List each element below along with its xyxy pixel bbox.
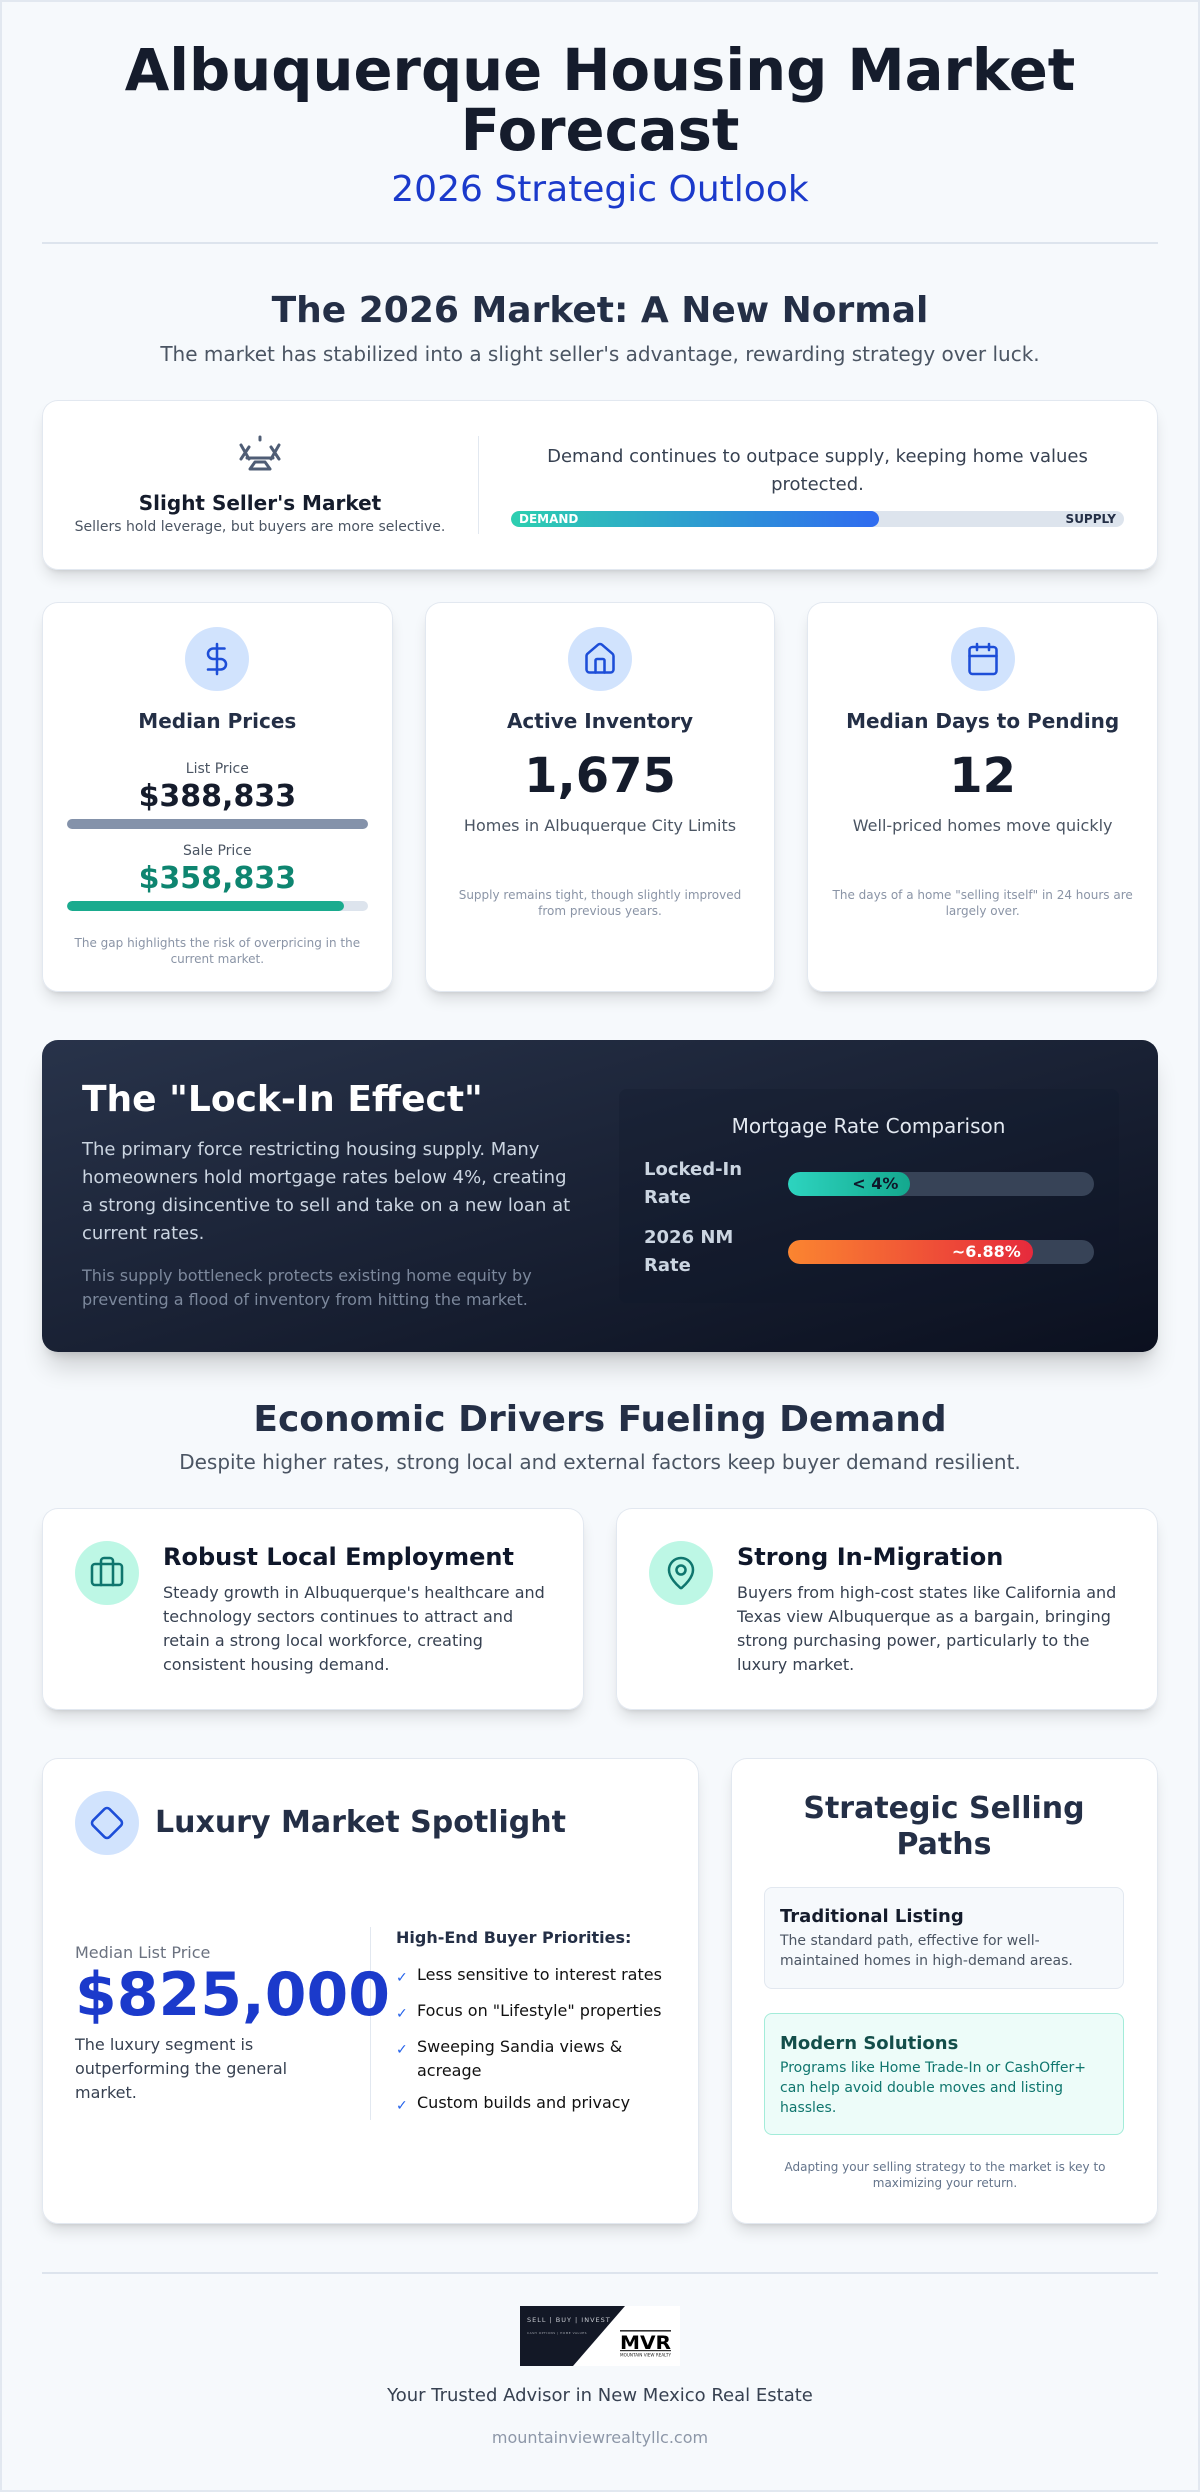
driver text: Buyers from high-cost states like California and <box>737 1583 1116 1602</box>
panel: local employment <box>42 1508 584 1710</box>
lock-in paragraph: current rates. <box>82 1223 204 1244</box>
logo: SELL | BUY | INVEST <box>527 2316 611 2324</box>
lock-in paragraph <box>82 1139 570 1244</box>
driver heading: Robust Local Employment <box>163 1543 514 1571</box>
logo: CASH OPTIONS | HOME VALUES <box>527 2331 587 2335</box>
path text: hassles. <box>780 2100 836 2116</box>
list price value: $388,833 <box>139 779 296 814</box>
paths note: Adapting your selling strategy to the market is key to <box>784 2160 1106 2174</box>
days description: Well-priced homes move quickly <box>853 816 1113 835</box>
icon: calendar <box>951 627 1015 691</box>
priorities list: Custom builds and privacy <box>417 2093 630 2112</box>
card heading: Median Prices <box>138 709 296 733</box>
luxury heading: Luxury Market Spotlight <box>155 1805 566 1840</box>
driver text: technology sectors continues to attract and <box>163 1607 513 1626</box>
lock-in heading: The "Lock-In Effect" <box>82 1079 483 1120</box>
footer tagline: Your Trusted Advisor in New Mexico Real Estate <box>387 2385 813 2406</box>
icon: house <box>568 627 632 691</box>
days number: 12 <box>949 748 1016 804</box>
path title: Traditional Listing <box>780 1906 964 1927</box>
driver text: retain a strong local workforce, creating <box>163 1631 483 1650</box>
path text: The standard path, effective for well- <box>780 1933 1040 1949</box>
path: modern solutions <box>764 2013 1124 2135</box>
days note: largely over. <box>946 904 1020 918</box>
driver text: luxury market. <box>737 1655 854 1674</box>
bar: locked-in <box>788 1172 1094 1196</box>
demand statement: Demand continues to outpace supply, keeping home values <box>547 446 1088 467</box>
inventory number: 1,675 <box>524 748 676 804</box>
driver text: Steady growth in Albuquerque's healthcare and <box>163 1583 545 1602</box>
status description: Sellers hold leverage, but buyers are more selective. <box>75 519 445 535</box>
sale price bar <box>67 901 368 911</box>
panel: market balance <box>42 400 1158 570</box>
subtitle: 2026 Strategic Outlook <box>391 169 809 210</box>
section subheading: The market has stabilized into a slight seller's advantage, rewarding strategy over luck. <box>160 342 1040 366</box>
row label: locked-in: Locked-In <box>644 1159 742 1180</box>
status title: Slight Seller's Market <box>139 491 381 515</box>
demand supply bar: SUPPLY <box>1066 512 1116 526</box>
icon: dollar <box>185 627 249 691</box>
driver text <box>736 1583 1116 1674</box>
icon: scale <box>239 436 281 470</box>
luxury description: The luxury segment is <box>75 2035 253 2054</box>
bar: locked-in: < 4% <box>852 1174 898 1193</box>
paths note <box>784 2160 1106 2190</box>
demand statement <box>547 446 1088 495</box>
row label: 2026 NM: 2026 NM <box>644 1227 733 1248</box>
demand statement: protected. <box>771 474 864 495</box>
title <box>125 37 1075 164</box>
logo: MVR <box>620 2332 671 2354</box>
days note <box>832 888 1133 918</box>
row label: 2026 NM <box>644 1227 733 1276</box>
median list label: Median List Price <box>75 1943 210 1962</box>
priorities list: ✓ <box>396 1970 408 1986</box>
lock-in secondary note: This supply bottleneck protects existing home equity by <box>82 1266 532 1285</box>
driver text: Texas view Albuquerque as a bargain, bringing <box>737 1607 1111 1626</box>
row label: 2026 NM: Rate <box>644 1255 691 1276</box>
priorities list: ✓ <box>396 2006 408 2022</box>
luxury description: market. <box>75 2083 137 2102</box>
priorities list: Sweeping Sandia views & <box>417 2037 622 2056</box>
footer website: mountainviewrealtyllc.com <box>492 2428 708 2447</box>
card heading: Active Inventory <box>507 709 693 733</box>
inventory note: from previous years. <box>538 904 662 918</box>
driver text <box>163 1583 545 1674</box>
price note <box>74 936 360 966</box>
priorities list: acreage <box>417 2061 481 2080</box>
panel: in-migration <box>616 1508 1158 1710</box>
section heading: new normal: The 2026 Market: A New Normal <box>272 290 928 331</box>
path text: Programs like Home Trade-In or CashOffer+ <box>780 2060 1086 2076</box>
logo: MOUNTAIN VIEW REALTY <box>620 2352 672 2358</box>
inventory note <box>459 888 741 918</box>
path text: maintained homes in high-demand areas. <box>780 1953 1073 1969</box>
panel: days to pending <box>807 602 1158 992</box>
section heading: economic drivers: Economic Drivers Fueling Demand <box>253 1399 947 1440</box>
panel: selling paths <box>731 1758 1158 2224</box>
lock-in paragraph: The primary force restricting housing supply. Many <box>82 1139 539 1160</box>
demand supply bar: DEMAND <box>519 512 578 526</box>
price note: current market. <box>171 952 264 966</box>
price note: The gap highlights the risk of overpricing in the <box>75 936 360 950</box>
icon: map pin <box>649 1541 713 1605</box>
title: Albuquerque Housing Market <box>125 37 1075 104</box>
path text <box>780 1933 1073 1969</box>
path text: can help avoid double moves and listing <box>780 2080 1063 2096</box>
paths note: maximizing your return. <box>873 2176 1017 2190</box>
panel: active inventory <box>425 602 775 992</box>
path: traditional listing <box>764 1887 1124 1989</box>
icon: briefcase <box>75 1541 139 1605</box>
inventory description: Homes in Albuquerque City Limits <box>464 816 736 835</box>
days note: The days of a home "selling itself" in 24 hours are <box>833 888 1133 902</box>
section subheading: Despite higher rates, strong local and external factors keep buyer demand resilient. <box>179 1450 1021 1474</box>
paths heading: Paths <box>896 1827 991 1862</box>
paths heading <box>803 1791 1085 1862</box>
inventory note: Supply remains tight, though slightly improved <box>459 888 741 902</box>
sale price label: Sale Price <box>183 843 252 859</box>
panel: median prices <box>42 602 393 992</box>
row label: locked-in <box>644 1159 742 1208</box>
sale price value: $358,833 <box>139 861 296 896</box>
luxury description <box>74 2035 287 2102</box>
icon: diamond <box>75 1791 139 1855</box>
bar: 2026 NM <box>788 1240 1094 1264</box>
paths heading: Strategic Selling <box>803 1791 1085 1826</box>
card heading: Median Days to Pending <box>846 709 1119 733</box>
row label: locked-in: Rate <box>644 1187 691 1208</box>
bar: 2026 NM: ~6.88% <box>952 1242 1021 1261</box>
priorities list <box>396 1965 662 2114</box>
path text <box>780 2060 1086 2116</box>
driver text: consistent housing demand. <box>163 1655 389 1674</box>
luxury description: outperforming the general <box>75 2059 287 2078</box>
driver text: strong purchasing power, particularly to the <box>737 1631 1090 1650</box>
priorities list: Focus on "Lifestyle" properties <box>417 2001 661 2020</box>
title: Forecast <box>461 97 739 164</box>
lock-in secondary note: preventing a flood of inventory from hitting the market. <box>82 1290 528 1309</box>
list price label: List Price <box>186 761 249 777</box>
demand supply bar <box>511 511 1124 527</box>
lock-in secondary note <box>82 1266 532 1309</box>
priorities list: ✓ <box>396 2042 408 2058</box>
chart: mortgage rate comparison <box>619 1089 1119 1303</box>
driver heading: Strong In-Migration <box>737 1543 1003 1571</box>
list price bar <box>67 819 368 829</box>
lock-in paragraph: homeowners hold mortgage rates below 4%, creating <box>82 1167 567 1188</box>
path title: Modern Solutions <box>780 2033 958 2054</box>
panel: lock-in effect <box>42 1040 1158 1352</box>
panel: luxury market <box>42 1758 699 2224</box>
priorities heading: High-End Buyer Priorities: <box>396 1928 631 1947</box>
priorities list: ✓ <box>396 2098 408 2114</box>
chart title: Mortgage Rate Comparison <box>732 1114 1005 1138</box>
priorities list: Less sensitive to interest rates <box>417 1965 662 1984</box>
lock-in paragraph: a strong disincentive to sell and take on a new loan at <box>82 1195 570 1216</box>
logo <box>520 2306 680 2366</box>
luxury price: $825,000 <box>75 1960 390 2030</box>
